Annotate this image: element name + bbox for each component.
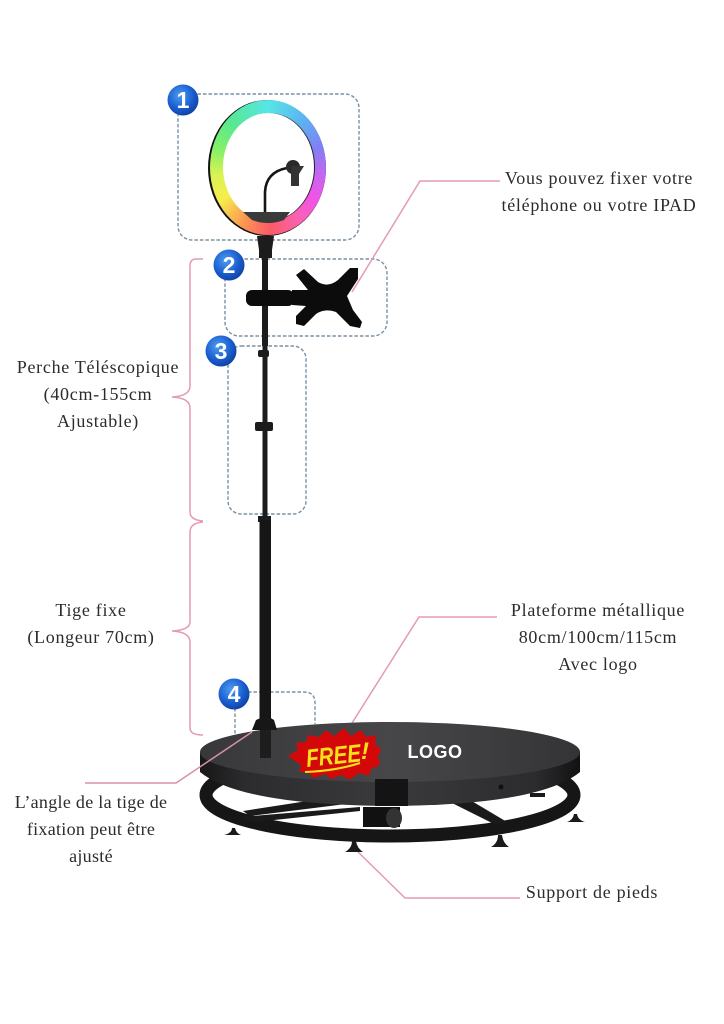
- label: telescopic pole: (40cm-155cm: [44, 384, 152, 404]
- tablet holder: [246, 268, 362, 328]
- free badge: [288, 728, 381, 780]
- dashed box 1: [178, 94, 359, 240]
- label: fixed rod: [27, 600, 155, 647]
- icon: RGB ring light: [208, 100, 326, 236]
- badge 2: [214, 250, 244, 280]
- dashed box 2: [225, 259, 387, 336]
- badge 1: 1: [177, 87, 190, 113]
- label: adjustable angle: [15, 792, 167, 866]
- badge 2: 2: [223, 252, 235, 278]
- label: feet support: Support de pieds: [526, 882, 658, 902]
- label: fixed rod: (Longeur 70cm): [27, 627, 155, 647]
- label: metal platform: 80cm/100cm/115cm: [519, 627, 677, 647]
- telescopic pole: [255, 236, 274, 522]
- label: metal platform: Avec logo: [558, 654, 638, 674]
- badge 1: [168, 84, 198, 116]
- fixed pole: [260, 520, 271, 720]
- label: phone or iPad: téléphone ou votre IPAD: [502, 195, 696, 215]
- badge 3: 3: [215, 338, 227, 364]
- badge 4: [218, 678, 250, 710]
- free badge: !: [361, 738, 369, 765]
- badge 4: 4: [228, 681, 241, 707]
- label: telescopic pole: Perche Téléscopique: [17, 357, 179, 377]
- free badge: FREE: [305, 739, 363, 773]
- label: phone or iPad: Vous pouvez fixer votre: [505, 168, 693, 188]
- badge 3: [206, 336, 236, 366]
- dashed box 4: [235, 692, 315, 740]
- label: metal platform: [511, 600, 685, 674]
- label: fixed rod: Tige fixe: [55, 600, 127, 620]
- pink leader lines and braces: [172, 181, 520, 898]
- lower ring and frame: [206, 754, 574, 836]
- dashed box 3: [228, 346, 306, 514]
- ring light centre: [223, 113, 314, 221]
- angle leader line: [85, 732, 252, 783]
- ring light phone holder: [243, 160, 304, 223]
- ring light colour band: [210, 100, 326, 235]
- label: telescopic pole: Ajustable): [57, 411, 139, 431]
- logo text: LOGO: [408, 742, 462, 762]
- label: adjustable angle: ajusté: [69, 846, 113, 866]
- label: adjustable angle: fixation peut être: [27, 819, 155, 839]
- label: metal platform: Plateforme métallique: [511, 600, 685, 620]
- round metal platform: [200, 722, 580, 806]
- label: adjustable angle: L’angle de la tige de: [15, 792, 167, 812]
- label: phone or iPad: [502, 168, 696, 215]
- label: telescopic pole: [17, 357, 179, 431]
- feet: [224, 793, 585, 852]
- pole base bracket: [252, 717, 277, 758]
